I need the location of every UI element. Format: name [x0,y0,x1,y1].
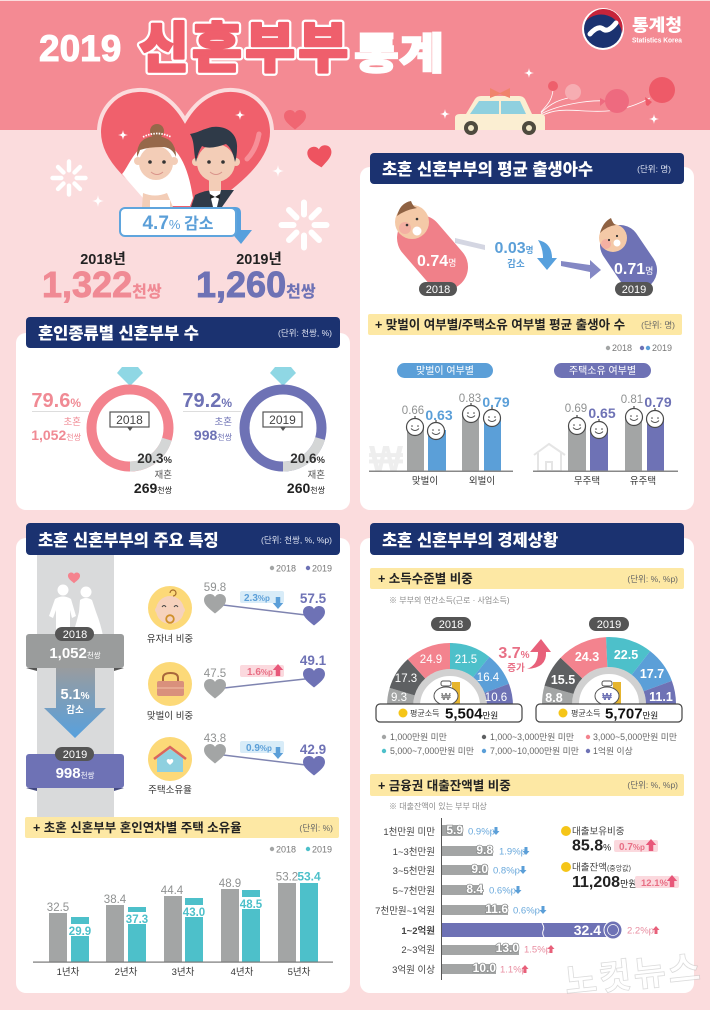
semicircle chart 2018 [391,654,507,706]
header band [0,1,710,130]
bar chart: ownership by marriage year: 3년차 [172,966,195,978]
labels 2018 first marriage: 초혼 [64,416,81,428]
heading [26,523,340,555]
semicircle chart 2018: 10.6 [485,692,507,704]
subheading: children by dual income and housing: (단위: 명) [641,320,675,330]
semicircle chart 2019 [545,648,673,705]
icon: couple silhouette [49,572,103,636]
heading [26,317,340,348]
semicircle chart 2018: 9.3 [391,692,407,704]
legend: 2019 [652,343,672,353]
bar chart: loan balance: 1.9%p [499,846,526,858]
bar chart: loan balance: 0.6%p [489,886,516,896]
semicircle chart 2018: 21.5 [455,654,477,666]
icon: baby 2019: 2019 [622,284,646,296]
icon: money bag: ₩ [441,692,451,703]
labels 2019 remarriage: 재혼 [308,469,325,481]
legend: 2018 [276,844,296,854]
pill: dual income [397,363,493,378]
bar chart: housing: 무주택 [574,476,600,487]
bar chart: ownership by marriage year: 53.2 [276,872,298,884]
subheading: home ownership by year [25,817,339,838]
row: dual income [147,653,327,722]
pill: housing [554,363,651,378]
average income 2018 [376,704,522,722]
panel: economic status [360,523,694,993]
panel: couples by marriage type [16,317,350,510]
icon: baby 2019 [599,218,653,296]
arrow: up [527,639,551,669]
semicircle chart 2019: 17.7 [640,667,664,681]
pill 2019: 2019 [597,619,621,631]
bar chart: dual income: 0.83 [459,393,481,405]
bar chart: dual income: 0.66 [402,405,424,417]
pill: housing: 주택소유 여부별 [569,365,636,377]
arrow: gray connector [455,238,485,250]
subheading: loan balance: (단위: %, %p) [627,780,678,790]
bar chart: housing: 0.65 [588,405,616,421]
icon: house [534,444,565,471]
icon: baby 2018: 2018 [426,284,450,296]
bar chart: ownership by marriage year: 38.4 [104,894,127,906]
pill 2019 [589,617,629,631]
labels 2019 first marriage: 79.2% [182,390,232,412]
bar chart: loan balance: 1천만원 미만 [383,827,435,838]
illustration: bride and groom in heart [99,90,272,212]
labels 2018 remarriage: 재혼 [155,469,172,481]
bar chart: loan balance: 3억원 이상 [392,964,435,976]
bar chart: loan balance: 5~7천만원 [393,886,435,897]
bar chart: loan balance: 1.1%p [500,964,527,976]
heading [370,153,684,184]
bar chart: ownership by marriage year: 2년차 [115,966,138,978]
row: home ownership: 42.9 [300,742,326,757]
labels 2019 first marriage [182,390,241,443]
legend [606,343,672,353]
subheading: children by dual income and housing: + 맞벌이 여부별/주택소유 여부별 평균 출생아 수 [375,318,625,332]
legend: income bands: 5,000~7,000만원 미만 [390,746,474,756]
bar chart: ownership by marriage year [33,870,333,978]
title: 2019 [39,28,121,69]
labels 2018 remarriage [134,451,173,496]
row: dual income: 49.1 [300,653,327,668]
legend: 2019 [312,564,332,574]
subheading: home ownership by year: (단위: %) [299,823,333,833]
box: 2019 count: 998천쌍 [56,765,95,782]
bar chart: loan balance: 13.0 [496,941,519,955]
row: home ownership: 0.9%p [246,743,272,754]
icon: won: ₩ [369,438,403,479]
bar chart: ownership by marriage year: 5년차 [288,966,311,978]
stat: 2019 couples: 2019년 [236,251,282,268]
stat: median loan balance [561,862,679,891]
labels 2018 remarriage: 269천쌍 [134,480,173,496]
logo: Statistics Korea: 통계청 [632,16,682,35]
heading: 초혼 신혼부부의 평균 출생아수 [382,160,593,179]
semicircle chart 2019: 11.1 [649,690,673,704]
subheading: income level [370,568,684,589]
box: 2018 count [26,627,124,671]
bar chart: loan balance: 2.2%p [627,926,654,936]
bar chart: housing: 유주택 [630,476,656,487]
labels 2019 remarriage: 260천쌍 [287,480,326,496]
decorative hearts and sparkles [52,110,333,248]
labels 2018 first marriage [31,390,89,443]
bar chart: ownership by marriage year: 1년차 [57,966,80,978]
bar chart: loan balance: 5.9 [446,823,463,837]
bar chart: ownership by marriage year: 48.9 [219,878,241,890]
stat: loan holding share: 85.8% [572,838,611,854]
labels 2019 first marriage: 998천쌍 [194,427,233,443]
stat: 2019 couples: 1,260천쌍 [196,264,316,305]
average income 2019: 평균소득 [571,708,600,718]
stat: 0.03 decrease [495,240,533,270]
title [39,19,444,79]
bar chart: loan balance: 2~3억원 [401,944,435,956]
bar chart: ownership by marriage year: 48.5 [240,899,263,911]
bar chart: dual income [369,393,513,487]
stat: median loan balance: 11,208만원 [572,874,637,891]
stat: median loan balance: 대출잔액(중앙값) [572,862,631,874]
labels 2018 remarriage: 20.3% [137,451,173,466]
legend: income bands: 7,000~10,000만원 미만 [490,746,579,756]
bar chart: loan balance: 7천만원~1억원 [375,905,435,917]
logo: Statistics Korea: Statistics Korea [632,38,682,44]
row: with children: 57.5 [300,591,327,606]
bar chart: ownership by marriage year: 37.3 [126,914,148,926]
subheading: children by dual income and housing [368,314,682,335]
box: 2018 count: 2018 [63,629,87,641]
gray column [37,555,114,817]
bar chart: loan balance: 0.9%p [468,826,495,838]
donut ring 2018: 2018 [116,413,143,427]
average income 2019 [536,704,682,722]
badge: 4.7% decrease [120,207,252,244]
legend: 2019 [312,844,332,854]
bar chart: loan balance: 1~2억원 [401,925,435,937]
arrow: 5.1% decrease: 감소 [66,704,84,716]
semicircle chart 2019: 22.5 [614,648,638,662]
icon: baby 2018 [395,201,457,296]
bar chart: dual income: 0.63 [425,407,453,423]
bar chart: loan balance [375,818,660,980]
heading: 초혼 신혼부부의 경제상황 [382,531,558,550]
bar chart: dual income: 외벌이 [469,475,495,487]
bar chart: ownership by marriage year: 32.5 [47,902,69,914]
subheading: loan balance: + 금융권 대출잔액별 비중 [378,779,511,793]
donut ring 2019: 2019 [269,413,296,427]
stat: median loan balance: 12.1% [641,878,668,889]
row: home ownership [148,733,326,796]
title: 통계 [354,31,444,79]
row: dual income: 1.6%p [247,667,273,678]
bar chart: loan balance: 0.8%p [493,866,520,876]
labels 2018 first marriage: 79.6% [31,390,81,412]
bar chart: loan balance: 8.4 [466,882,483,896]
average income 2018: 평균소득 [410,708,439,718]
bar chart: loan balance: 0.6%p [513,906,540,916]
legend: income bands: 1억원 이상 [593,745,633,756]
icon: wedding car with balloons [440,68,675,135]
semicircle chart 2018: 16.4 [477,672,500,684]
legend: income bands: 1,000만원 미만 [390,732,447,742]
row: dual income: 맞벌이 비중 [147,710,193,722]
bar chart: loan balance: 3~5천만원 [393,866,435,877]
row: with children: 유자녀 비중 [147,634,193,645]
stat: 3.7% increase: 3.7% [498,645,530,662]
labels 2019 first marriage: 초혼 [215,416,232,428]
pill: dual income: 맞벌이 여부별 [416,365,474,377]
bar chart: ownership by marriage year: 43.0 [183,907,205,919]
pill 2018 [431,617,471,631]
stat: 3.7% increase: 증가 [507,662,525,674]
donut ring 2019 [244,367,322,466]
semicircle chart 2019: 15.5 [551,673,575,687]
heading: 혼인종류별 신혼부부 수 [38,324,199,343]
bar chart: housing: 0.69 [565,403,587,415]
stat: 3.7% increase [498,645,530,674]
subheading: loan balance [370,774,684,796]
legend [270,844,332,854]
note: ※ 부부의 연간소득(근로 · 사업소득) [389,595,510,605]
stat: loan holding share: 0.7%p [619,842,645,853]
title: 신혼부부 [139,19,348,79]
bar chart: ownership by marriage year: 4년차 [231,966,254,978]
row: home ownership: 주택소유율 [148,785,192,796]
row: dual income: 47.5 [204,668,226,680]
row: home ownership: 43.8 [204,733,226,745]
bar chart: loan balance: 1~3천만원 [393,847,435,858]
semicircle chart 2019: 8.8 [545,691,563,705]
legend: income bands: 1,000~3,000만원 미만 [490,732,574,742]
watermark: 노컷뉴스 [563,949,702,1002]
arrow: blue down [537,240,557,270]
legend: income bands [382,732,677,756]
subheading: income level: + 소득수준별 비중 [378,572,473,586]
panel: average number of children [360,153,694,510]
icon: baby 2019: 0.71명 [614,261,653,278]
bar chart: dual income: 0.79 [482,394,510,410]
box: 2019 count: 2019 [63,749,87,761]
heading: (단위: 천쌍, %) [278,328,332,338]
bar chart: ownership by marriage year: 44.4 [161,885,184,897]
donut ring 2018 [92,367,168,466]
semicircle chart 2018: 24.9 [420,654,442,666]
note: ※ 대출잔액이 있는 부부 대상 [389,801,487,811]
bar chart: loan balance: 1.5%p [524,944,551,956]
labels 2018 first marriage: 1,052천쌍 [31,427,82,443]
stat: 2018 couples: 1,322천쌍 [42,264,162,305]
heading: 초혼 신혼부부의 주요 특징 [38,531,219,550]
subheading: income level: (단위: %, %p) [627,574,678,584]
average income 2019: 5,707만원 [605,706,658,722]
legend: income bands: 3,000~5,000만원 미만 [593,732,677,742]
bar chart: ownership by marriage year: 29.9 [69,926,91,938]
legend [270,564,332,574]
average income 2018: 5,504만원 [445,706,498,722]
bar chart: dual income: 맞벌이 [412,475,438,487]
arrow: purple to 2019 [561,260,601,279]
heading: (단위: 명) [637,164,671,174]
heading [370,523,684,555]
panel: main characteristics [16,523,350,993]
icon: baby 2018: 0.74명 [417,253,456,270]
arrow: 5.1% decrease [44,668,106,738]
subheading: home ownership by year: + 초혼 신혼부부 혼인연차별 주택 소유율 [33,821,242,835]
heading: (단위: 천쌍, %, %p) [261,535,332,545]
stat: 0.03 decrease: 감소 [507,258,525,270]
bar chart: loan balance: 9.0 [471,862,488,876]
box: 2019 count [26,747,124,791]
bar chart: housing [533,394,678,487]
stat: loan holding share [561,826,658,854]
bar chart: loan balance: 11.6 [485,902,508,916]
box: 2018 count: 1,052천쌍 [49,645,101,662]
bar chart: housing: 0.79 [644,394,672,410]
row: with children: 59.8 [204,582,226,594]
legend: 2018 [612,343,632,353]
semicircle chart 2019: 24.3 [575,650,599,664]
stat: loan holding share: 대출보유비중 [572,826,625,838]
bar chart: loan balance: 9.8 [476,843,493,857]
labels 2019 remarriage: 20.6% [290,451,326,466]
bar chart: ownership by marriage year: 53.4 [297,870,321,884]
pill 2018: 2018 [439,619,463,631]
bar chart: loan balance: 10.0 [473,961,496,975]
legend: 2018 [276,564,296,574]
arrow: 5.1% decrease: 5.1% [60,687,90,703]
title: 신혼부부 [139,19,348,79]
row: with children: 2.3%p [244,593,270,604]
icon: money bag: ₩ [602,692,612,703]
stat: 0.03 decrease: 0.03명 [495,240,533,257]
bar chart: housing: 0.81 [621,394,643,406]
bar chart: loan balance: 32.4 [574,922,601,938]
labels 2019 remarriage [287,451,326,496]
stat: 2018 couples: 2018년 [80,251,126,268]
badge: 4.7% decrease: 4.7% 감소 [142,213,214,234]
row: with children [147,582,327,645]
logo: Statistics Korea [582,8,682,50]
semicircle chart 2018: 17.3 [395,673,417,685]
